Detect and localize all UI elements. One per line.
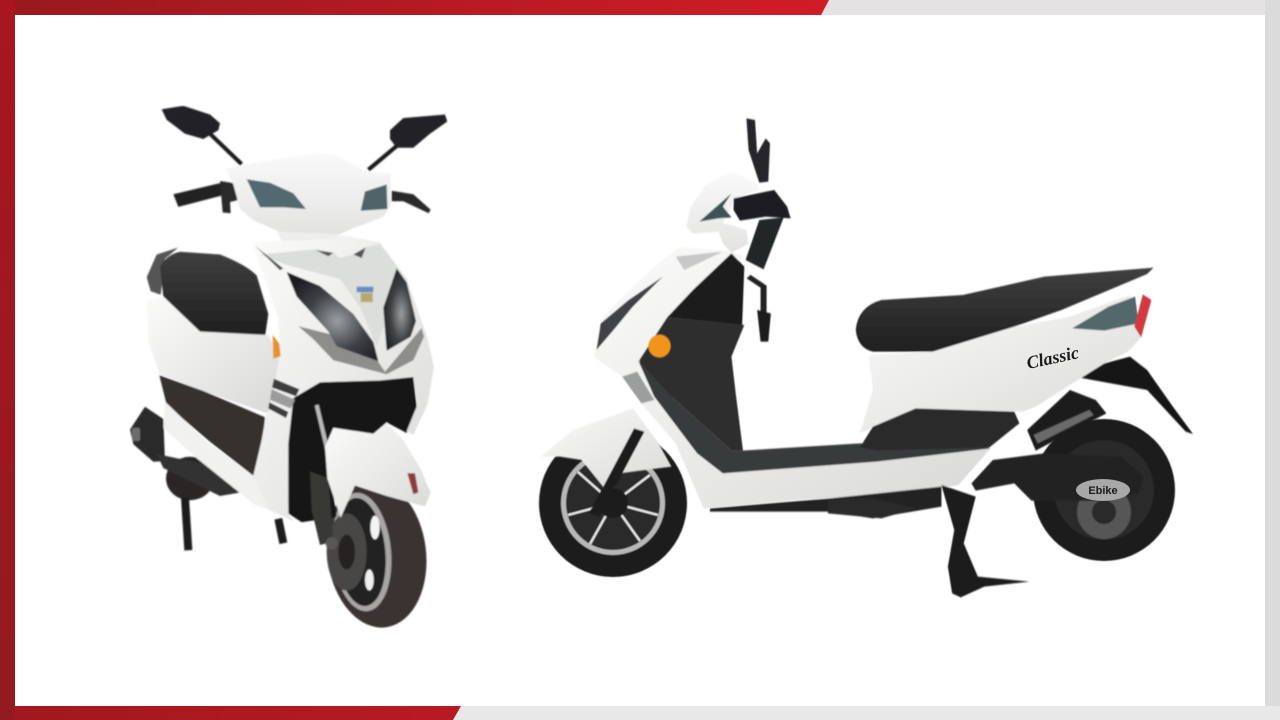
seat [147, 248, 268, 337]
decal stripes [268, 379, 299, 418]
fender reflector [407, 473, 418, 494]
scooter: side view [541, 118, 1193, 597]
model name: Classic [1025, 342, 1081, 373]
chrome trim [298, 326, 424, 374]
scooter: front three-quarter view [130, 106, 447, 634]
rear white body [860, 295, 1142, 433]
vent slots [255, 246, 366, 270]
steering column [746, 217, 784, 269]
headlights [287, 268, 416, 361]
indicator: amber [273, 335, 281, 359]
cowl lamp [699, 193, 731, 222]
swing arm [971, 453, 1144, 501]
badge [357, 287, 373, 302]
floor board [638, 360, 991, 473]
side body panel [147, 296, 280, 414]
tail lamp [1072, 294, 1151, 337]
lower dark panel [159, 375, 265, 476]
front mudguard [541, 408, 671, 487]
rear wheel and motor, front view [130, 407, 283, 550]
handle grip [734, 190, 791, 221]
swing arm logo [1076, 479, 1130, 501]
rear mudguard [1074, 357, 1193, 434]
front fork [594, 430, 639, 515]
headlamp cowl [226, 153, 391, 234]
key fob [749, 277, 771, 342]
side sticker [622, 372, 654, 403]
foot peg [1027, 390, 1106, 451]
seat [856, 268, 1154, 352]
swing arm logo: Ebike [1088, 485, 1118, 497]
under frame [710, 487, 941, 518]
front headlight [596, 277, 663, 350]
handlebar mirror [746, 118, 770, 183]
foot rest [828, 498, 916, 518]
glovebox recess [667, 253, 744, 325]
reflector amber [648, 335, 671, 357]
handlebar grips [173, 181, 431, 213]
front fork and cavity [287, 377, 417, 550]
wheel: side view rear [1033, 419, 1175, 561]
wheel: side view front [539, 429, 687, 577]
silver centre facet [260, 244, 415, 346]
upper crease [676, 252, 723, 270]
front apron shell [252, 234, 434, 521]
mirrors [162, 106, 447, 170]
centre stand [941, 485, 1029, 597]
headlamp cowl [686, 172, 759, 253]
front wheel [318, 473, 435, 634]
lower white skirt [163, 398, 295, 521]
cowl lights [247, 178, 387, 211]
front fender [325, 423, 431, 518]
lower dark body panel [860, 408, 1019, 451]
main body shell [594, 247, 991, 508]
neck [277, 229, 342, 241]
leg shield [639, 317, 744, 451]
